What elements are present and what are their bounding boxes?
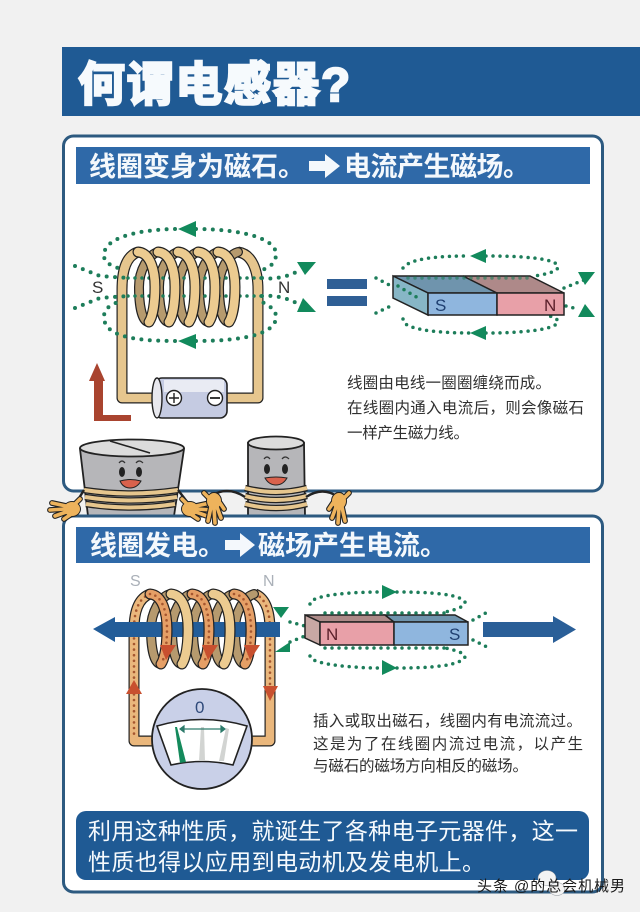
coil bands right	[245, 488, 307, 508]
coil back strands	[151, 594, 254, 664]
callout: 利用这种性质，就诞生了各种电子元器件，这一	[88, 818, 578, 844]
panel: coil generates electricity	[64, 516, 602, 892]
hand right mascot left	[204, 492, 224, 523]
watermark: 头条 @的总会机械男	[477, 878, 625, 895]
coil with meter diagram	[93, 573, 290, 789]
bar magnet diagram 2	[290, 585, 491, 675]
wire circuit	[134, 594, 270, 741]
description 2: 这是为了在线圈内流过电流，以产生	[313, 735, 583, 753]
description 2: 与磁石的磁场方向相反的磁场。	[313, 757, 528, 775]
magnet label N: N	[326, 625, 338, 644]
coil back strands	[139, 252, 238, 322]
mouth	[120, 480, 141, 488]
magnet side fields	[376, 278, 584, 313]
mascot bodies	[76, 436, 338, 516]
mouth	[265, 477, 287, 485]
magnet arrowheads	[382, 585, 397, 675]
field line bottom	[104, 302, 276, 341]
description 1: 线圈由电线一圈圈缠绕而成。	[347, 374, 551, 392]
title banner	[62, 47, 640, 116]
description 1: 在线圈内通入电流后，则会像磁石	[347, 399, 584, 417]
description 1: 一样产生磁力线。	[347, 424, 469, 442]
magnet body	[393, 276, 564, 315]
callout	[76, 811, 589, 880]
range arrow	[180, 726, 225, 732]
eyes	[119, 467, 142, 477]
pole label S: S	[130, 573, 141, 590]
hand left mascot right	[181, 499, 212, 519]
meter zero: 0	[195, 698, 204, 717]
wechat icon	[538, 870, 565, 896]
magnet bottom field	[403, 315, 558, 333]
magnet label S: S	[449, 625, 460, 644]
wire circuit	[122, 252, 258, 398]
plus terminal	[166, 390, 182, 406]
mascot right body	[248, 436, 305, 516]
hand left mascot left	[50, 499, 81, 519]
gray needles	[199, 727, 229, 761]
mascot hands	[50, 492, 349, 523]
field lines left	[75, 266, 128, 308]
coil with battery diagram	[75, 221, 316, 421]
hand right mascot right	[329, 492, 349, 523]
equals sign	[327, 279, 367, 306]
coil bands left	[84, 490, 178, 508]
title text: 何谓电感器?	[78, 58, 350, 111]
brows and nose	[119, 461, 143, 463]
mascot left body	[80, 440, 184, 516]
coil front strands	[150, 594, 251, 664]
minus terminal	[208, 390, 222, 406]
battery	[152, 378, 227, 418]
coil front strands	[138, 252, 235, 322]
magnet label N: N	[544, 296, 556, 315]
meter	[152, 689, 252, 789]
heading bar 1: 线圈变身为磁石。	[89, 152, 305, 182]
description 2: 插入或取出磁石，线圈内有电流流过。	[313, 712, 582, 730]
magnet label S: S	[435, 296, 446, 315]
right field arrow	[483, 616, 576, 643]
field line top	[104, 229, 276, 270]
eyes	[264, 464, 288, 474]
pole label N: N	[263, 573, 275, 590]
green needle	[175, 727, 186, 763]
panel: coil becomes magnet	[64, 136, 602, 491]
magnet top field	[310, 592, 465, 612]
magnet arrowheads	[470, 249, 595, 340]
magnet side fields	[290, 610, 491, 649]
pole label S: S	[92, 278, 103, 297]
watermark	[477, 870, 625, 896]
heading bar 1: 电流产生磁场。	[344, 152, 530, 182]
pole label N: N	[278, 278, 290, 297]
heading arrow	[309, 154, 340, 178]
inner field dots	[128, 278, 262, 296]
callout: 性质也得以应用到电动机及发电机上。	[88, 849, 485, 875]
left field arrow	[93, 617, 280, 642]
field lines right	[262, 270, 300, 304]
mascot arms	[76, 490, 338, 503]
magnet top field	[403, 256, 558, 276]
brows	[264, 457, 289, 459]
heading bar 2: 线圈发电。	[90, 531, 225, 561]
description 1	[347, 374, 584, 442]
bar magnet diagram	[376, 249, 595, 340]
heading bar 2	[76, 527, 590, 563]
magnet body	[305, 613, 468, 648]
magnet bottom field	[310, 648, 465, 668]
field arrowheads	[178, 221, 316, 349]
heading arrow	[225, 533, 255, 557]
meter dial	[157, 720, 247, 765]
current direction arrow	[89, 363, 131, 421]
field arrowheads	[273, 607, 290, 652]
description 2	[313, 712, 583, 775]
heading bar 2: 磁场产生电流。	[258, 531, 447, 561]
current arrowheads	[126, 645, 278, 701]
heading bar 1	[76, 147, 590, 184]
